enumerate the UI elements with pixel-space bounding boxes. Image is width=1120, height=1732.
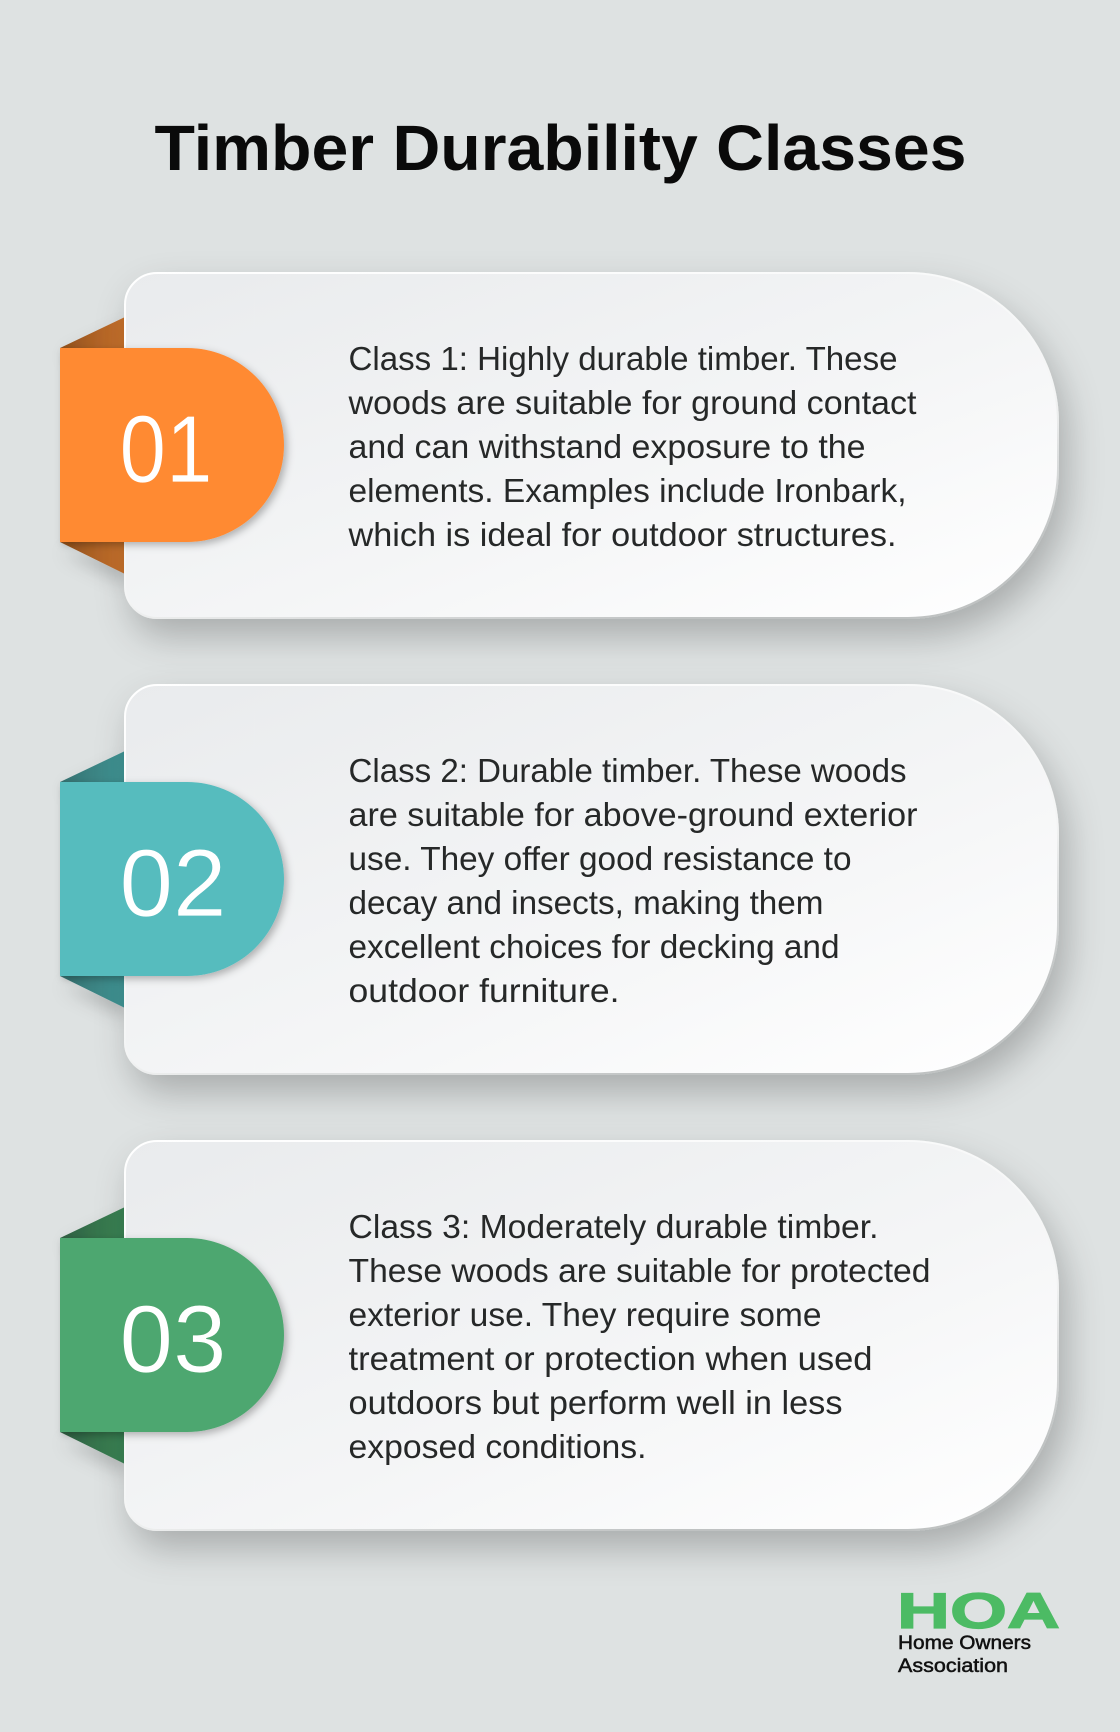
ribbon fold — [60, 1207, 125, 1464]
number tab — [60, 348, 284, 542]
description — [348, 752, 918, 1009]
description: outdoors but perform well in less — [348, 1384, 842, 1421]
description: which is ideal for outdoor structures. — [347, 516, 896, 553]
number tab — [60, 1238, 284, 1432]
logo: HOA Home Owners Association — [897, 1583, 1060, 1677]
logo: HOA Home Owners Association: Association — [898, 1656, 1008, 1677]
description: elements. Examples include Ironbark, — [348, 472, 906, 509]
description: exterior use. They require some — [348, 1296, 822, 1333]
ribbon fold — [60, 751, 125, 1008]
title: Timber Durability Classes — [154, 112, 966, 184]
card — [125, 1141, 1058, 1530]
card — [125, 273, 1058, 618]
number tab — [60, 782, 284, 976]
number: 03 — [120, 1286, 226, 1393]
description: exposed conditions. — [348, 1428, 646, 1465]
description: Class 3: Moderately durable timber. — [348, 1208, 878, 1245]
description: woods are suitable for ground contact — [347, 384, 917, 421]
description: Class 2: Durable timber. These woods — [348, 752, 906, 789]
panel: class 3 — [60, 1141, 1058, 1530]
description — [348, 1208, 931, 1465]
logo: HOA Home Owners Association: HOA — [897, 1583, 1060, 1639]
description — [347, 340, 916, 553]
description: Class 1: Highly durable timber. These — [348, 340, 898, 377]
number: 02 — [120, 830, 226, 937]
description: outdoor furniture. — [348, 972, 620, 1009]
panel: class 2 — [60, 685, 1058, 1074]
number: 01 — [120, 396, 212, 503]
logo: HOA Home Owners Association: Home Owners — [898, 1633, 1031, 1654]
description: use. They offer good resistance to — [348, 840, 852, 877]
description: are suitable for above-ground exterior — [348, 796, 918, 833]
panel: class 1 — [60, 273, 1058, 618]
description: and can withstand exposure to the — [348, 428, 866, 465]
ribbon fold — [60, 317, 125, 574]
description: excellent choices for decking and — [348, 928, 840, 965]
description: decay and insects, making them — [348, 884, 824, 921]
description: These woods are suitable for protected — [348, 1252, 931, 1289]
card — [125, 685, 1058, 1074]
description: treatment or protection when used — [348, 1340, 872, 1377]
